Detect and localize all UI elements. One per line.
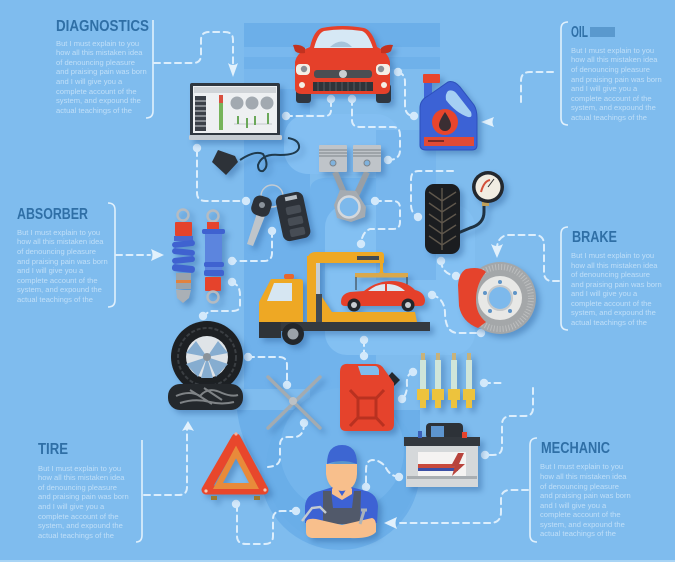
icon: flat tire xyxy=(168,384,243,410)
text block: brake: and praising pain was born xyxy=(571,280,662,289)
bottom edge line xyxy=(0,560,675,562)
text block: oil: OIL xyxy=(571,24,588,41)
icon: car battery xyxy=(404,423,480,487)
icon: mechanic xyxy=(302,445,378,538)
icon: spark plugs xyxy=(417,353,475,408)
truck crane boom xyxy=(307,252,408,322)
text block: brake: how all this mistaken idea xyxy=(571,261,658,270)
text block: mechanic: actual teachings of the xyxy=(540,529,616,538)
text block: oil: actual teachings of the xyxy=(571,113,647,122)
text block: oil: system, and expound the xyxy=(571,103,656,112)
text block: absorber: ABSORBER xyxy=(17,206,88,223)
text block: diagnostics xyxy=(56,18,153,118)
icon: pistons and connecting rods xyxy=(319,145,381,222)
arrow: into brake xyxy=(491,244,503,258)
text block: mechanic: of denouncing pleasure xyxy=(540,482,619,491)
text block: absorber: and praising pain was born xyxy=(17,257,108,266)
text block: diagnostics: actual teachings of the xyxy=(56,106,132,115)
text block: oil: how all this mistaken idea xyxy=(571,55,658,64)
text block: diagnostics: and I will give you a xyxy=(56,77,123,86)
text block: mechanic: system, and expound the xyxy=(540,520,625,529)
mechanic cap xyxy=(327,445,357,464)
text block: mechanic: But I must explain to you xyxy=(540,462,623,471)
text block: absorber: complete account of the xyxy=(17,276,98,285)
text block: tire: But I must explain to you xyxy=(38,464,121,473)
text block: tire: complete account of the xyxy=(38,512,119,521)
text block: brake: BRAKE xyxy=(572,229,617,246)
text block: absorber: of denouncing pleasure xyxy=(17,247,96,256)
text block: oil: of denouncing pleasure xyxy=(571,65,650,74)
truck cab xyxy=(259,279,303,322)
text block: mechanic xyxy=(530,438,631,542)
mechanic body xyxy=(305,487,378,523)
text block: tire: and praising pain was born xyxy=(38,492,129,501)
icon: car keys xyxy=(247,185,312,246)
icon: warning triangle xyxy=(204,432,267,500)
arrow: into shock absorbers xyxy=(151,249,164,261)
text block: diagnostics: But I must explain to you xyxy=(56,39,139,48)
text block: tire: how all this mistaken idea xyxy=(38,473,125,482)
text block: mechanic: how all this mistaken idea xyxy=(540,472,627,481)
icon: laptop with diagnostics screen xyxy=(189,83,282,140)
icon: tire tread and pressure gauge xyxy=(425,171,504,254)
text block: oil: complete account of the xyxy=(571,94,652,103)
text block: oil: But I must explain to you xyxy=(571,46,654,55)
arrow: up to flat tire xyxy=(182,421,194,431)
icon: tow truck with car xyxy=(259,252,430,345)
icon: wheel with alloy rim xyxy=(171,321,243,393)
text block: tire: of denouncing pleasure xyxy=(38,483,117,492)
text block: diagnostics: of denouncing pleasure xyxy=(56,58,135,67)
arrow: into mechanic xyxy=(384,517,397,529)
text block: oil: and praising pain was born xyxy=(571,75,662,84)
text block: tire: actual teachings of the xyxy=(38,531,114,540)
text block: mechanic: MECHANIC xyxy=(541,440,610,457)
truck chassis xyxy=(259,322,430,331)
text block: absorber: and I will give you a xyxy=(17,266,84,275)
text block: tire: and I will give you a xyxy=(38,502,105,511)
text block: mechanic: and praising pain was born xyxy=(540,491,631,500)
arrow: into oil jug xyxy=(481,117,494,127)
text block: oil xyxy=(561,22,662,125)
icon: red car front xyxy=(293,26,393,103)
text block: mechanic: complete account of the xyxy=(540,510,621,519)
text block: tire xyxy=(38,440,142,542)
text block: brake: actual teachings of the xyxy=(571,318,647,327)
text block: brake: of denouncing pleasure xyxy=(571,270,650,279)
truck flatbed xyxy=(322,297,417,322)
icon: brake disc and caliper xyxy=(458,262,536,334)
text block: brake: system, and expound the xyxy=(571,308,656,317)
text block: brake: But I must explain to you xyxy=(571,251,654,260)
text block: oil: and I will give you a xyxy=(571,84,638,93)
icon: cross lug wrench xyxy=(268,377,320,428)
text block: mechanic: and I will give you a xyxy=(540,501,607,510)
arrow: into laptop xyxy=(228,63,238,77)
mechanic face xyxy=(326,464,357,491)
text block: brake xyxy=(561,227,662,330)
icon: oil jug xyxy=(420,74,477,150)
icon: diagnostic cable and plug xyxy=(212,138,299,175)
text block: diagnostics: complete account of the xyxy=(56,87,137,96)
text block: absorber: But I must explain to you xyxy=(17,228,100,237)
mechanic overalls xyxy=(323,491,361,524)
text block: absorber xyxy=(17,203,115,307)
text block: absorber: actual teachings of the xyxy=(17,295,93,304)
text block: tire: TIRE xyxy=(38,441,68,458)
text block: brake: complete account of the xyxy=(571,299,652,308)
text block: brake: and I will give you a xyxy=(571,289,638,298)
icon: shock absorbers xyxy=(172,210,225,303)
car on flatbed xyxy=(341,281,425,306)
text block: absorber: how all this mistaken idea xyxy=(17,237,104,246)
mechanic arms xyxy=(306,518,376,538)
text block: diagnostics: DIAGNOSTICS xyxy=(56,18,149,35)
text block: diagnostics: how all this mistaken idea xyxy=(56,48,143,57)
dashed connectors xyxy=(116,32,559,544)
text block: diagnostics: system, and expound the xyxy=(56,96,141,105)
text block: diagnostics: and praising pain was born xyxy=(56,67,147,76)
background central shapes xyxy=(237,23,475,550)
icon: red jerry can xyxy=(340,364,400,431)
text block: absorber: system, and expound the xyxy=(17,285,102,294)
text block: tire: system, and expound the xyxy=(38,521,123,530)
